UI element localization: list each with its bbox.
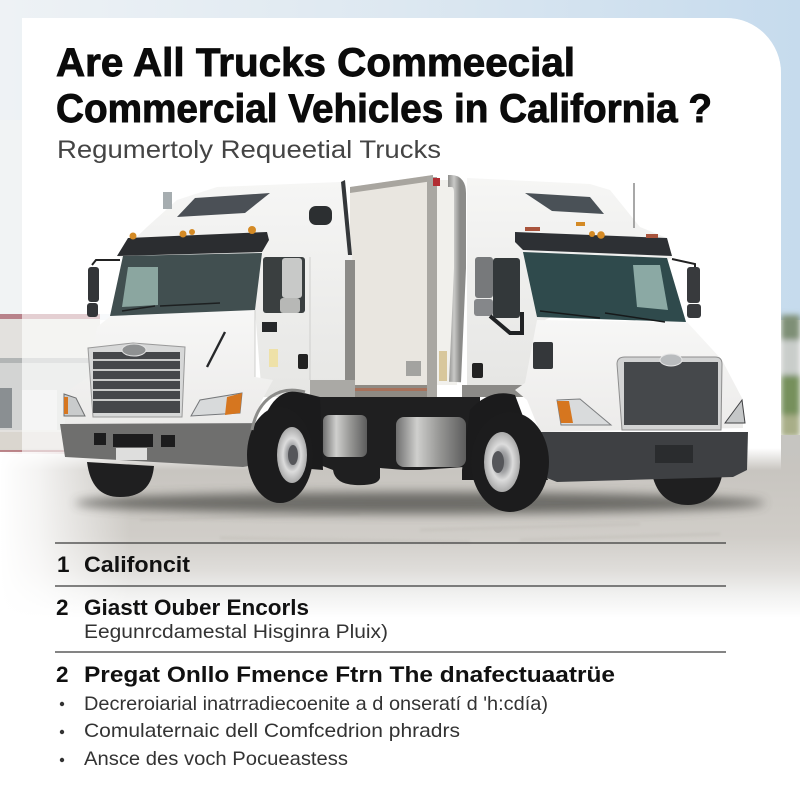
- cargo box between trucks: [312, 175, 480, 485]
- right door mirror: [475, 257, 493, 298]
- right badge: [660, 354, 682, 366]
- right lower cab band: [462, 385, 527, 397]
- title: Are All Trucks Commeecial: [56, 41, 575, 85]
- exhaust stack: [448, 181, 460, 382]
- grille badge: [122, 344, 146, 356]
- list item 3: Pregat Onllo Fmence Ftrn The dnafectuaatrüe: [84, 662, 615, 687]
- bullet list: Decreroiarial inatrradiecoenite a d onseratí d 'h:cdía): [84, 693, 548, 715]
- list item 2: Eegunrcdamestal Hisginra Pluix): [84, 622, 388, 643]
- panel wash right: [300, 18, 781, 480]
- right roof vent: [525, 193, 604, 214]
- right windshield: [523, 252, 686, 322]
- left truck cab: [117, 180, 355, 397]
- title: [56, 41, 712, 131]
- side window: [263, 257, 305, 313]
- right wheel well: [462, 393, 548, 480]
- list item 2: [56, 595, 388, 643]
- list item 1: 1: [57, 552, 70, 577]
- roof vent: [177, 193, 270, 217]
- wheel arch: [252, 390, 305, 430]
- right side window: [493, 258, 520, 318]
- windshield: [110, 253, 262, 316]
- subtitle: Regumertoly Requeetial Trucks: [57, 136, 441, 164]
- driver mirror: [88, 267, 99, 302]
- hood: [65, 310, 273, 425]
- right grille: [617, 357, 722, 430]
- door mirror: [282, 258, 302, 298]
- fender vent: [533, 342, 553, 369]
- wheel well: [262, 391, 323, 470]
- background building left: [0, 314, 100, 454]
- right fuel tank: [396, 417, 466, 467]
- hood wiper: [207, 332, 225, 367]
- exhaust stub: [163, 192, 172, 209]
- panel wash upper left: [22, 18, 422, 314]
- visor: [117, 232, 269, 256]
- left truck: [60, 180, 367, 503]
- side vent: [345, 260, 355, 380]
- white content panel: [22, 18, 781, 470]
- right headlight: [557, 399, 611, 425]
- bullet list: Ansce des voch Pocueastess: [84, 748, 348, 770]
- antenna: [633, 183, 635, 228]
- right far mirror: [687, 267, 700, 303]
- headlight left: [64, 394, 85, 416]
- ground shadow: [75, 492, 765, 514]
- right bumper: [527, 432, 748, 482]
- list section rules: [55, 543, 726, 652]
- right hood: [515, 320, 743, 432]
- bullet list: Comulaternaic dell Comfcedrion phradrs: [84, 720, 460, 742]
- left near wheel: [247, 407, 313, 503]
- bumper: [60, 423, 270, 467]
- sleeper window: [309, 206, 332, 225]
- ground texture streaks: [140, 514, 720, 542]
- right near wheel: [471, 412, 549, 512]
- fuel tank left: [323, 415, 367, 457]
- right truck: [396, 178, 748, 512]
- list item 2: Giastt Ouber Encorls: [84, 595, 309, 620]
- title: Commercial Vehicles in California ?: [56, 87, 712, 131]
- right visor: [515, 232, 672, 256]
- headlight right: [191, 393, 242, 416]
- right truck cab: [467, 178, 672, 385]
- bullet list: [60, 693, 548, 770]
- ground fade left: [0, 452, 130, 622]
- left far tire: [87, 462, 154, 497]
- right far headlight: [725, 400, 745, 423]
- grille: [88, 343, 185, 417]
- list item 1: Califoncit: [84, 552, 191, 577]
- list item 3: 2: [56, 662, 69, 687]
- background trees right: [781, 315, 800, 437]
- right far tire: [652, 470, 723, 505]
- asphalt ground: [0, 448, 800, 618]
- list item 2: 2: [56, 595, 69, 620]
